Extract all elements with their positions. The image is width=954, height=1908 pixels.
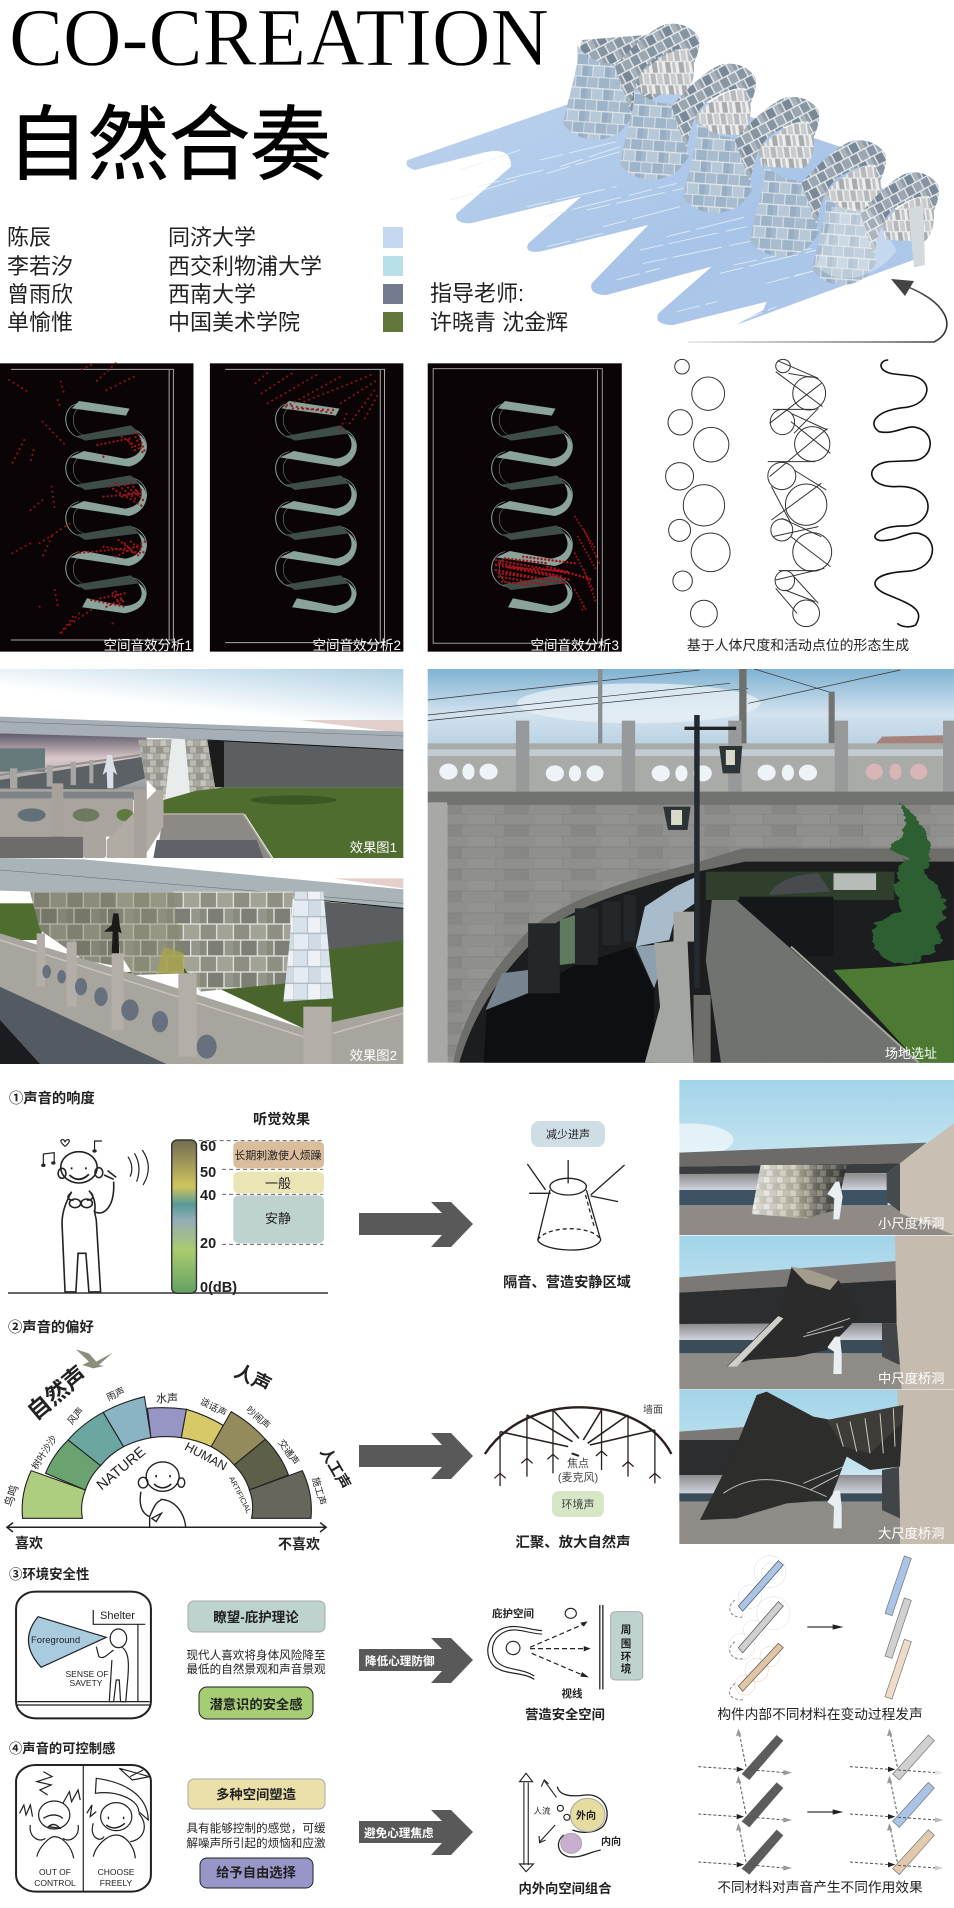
surrounding environment label: 围 <box>621 1638 631 1650</box>
team list <box>7 225 568 335</box>
section 1: loudness of sound: 减少进声 <box>546 1127 590 1141</box>
scale numbers <box>200 1139 237 1296</box>
arch opening <box>453 848 954 1063</box>
scale numbers: 60 <box>200 1139 216 1155</box>
section 2: sound preference: 不喜欢 <box>278 1536 320 1552</box>
theory box <box>188 1601 325 1632</box>
circles with tangents column <box>768 359 832 627</box>
universities: 同济大学 <box>168 225 256 250</box>
reduce sound box <box>531 1121 605 1147</box>
wall shadow <box>406 87 923 325</box>
segment labels: 风声 <box>65 1405 86 1427</box>
section 3: environmental safety: 视线 <box>562 1687 583 1700</box>
caption: 汇聚、放大自然声 <box>515 1533 631 1551</box>
free choice box <box>200 1858 313 1888</box>
dark figure <box>104 913 122 953</box>
description: 现代人喜欢将身体风险降至 <box>186 1648 326 1662</box>
render: medium bridge opening <box>679 1236 954 1389</box>
section 1: loudness of sound: 安静 <box>265 1211 291 1226</box>
hero render: serpentine shingled wall with shadow <box>406 24 939 325</box>
team names: 陈辰 <box>7 225 51 250</box>
render: view 1: 效果图1 <box>350 840 397 855</box>
inward/outward space diagram <box>520 1773 607 1872</box>
section 3: environmental safety: Foreground <box>31 1635 80 1646</box>
description: 最低的自然景观和声音景观 <box>186 1662 326 1676</box>
sound waves <box>128 1150 148 1185</box>
dark reflecting bars <box>742 1735 783 1875</box>
section 2: sound preference: 焦点 <box>567 1457 589 1470</box>
far rail <box>0 757 145 789</box>
material diagram: materials act differently on sound: 不同材料对声音产生不同作用效果 <box>717 1879 923 1895</box>
arrow with label <box>359 1810 473 1855</box>
render: view 2 <box>0 858 403 1064</box>
ground line <box>8 1292 328 1294</box>
section 1: loudness of sound <box>8 1089 631 1296</box>
description <box>186 1821 326 1850</box>
background through arch <box>706 872 894 900</box>
circles column <box>666 359 730 627</box>
render: medium bridge opening: 中尺度桥洞 <box>878 1371 944 1386</box>
category labels: 人工声 <box>316 1445 354 1492</box>
subconscious safety box <box>199 1687 313 1719</box>
grass <box>163 787 403 858</box>
arrow with label <box>359 1638 473 1683</box>
segment labels: 鸟鸣 <box>1 1483 21 1508</box>
render: view 2: 效果图2 <box>350 1048 397 1063</box>
bridge deck <box>0 858 403 908</box>
segment labels: 交通声 <box>275 1437 302 1467</box>
segment labels: 吵闹声 <box>243 1404 273 1432</box>
big arrow <box>359 1202 473 1247</box>
category labels: 自然声 <box>22 1361 92 1425</box>
ambient sound box <box>552 1491 604 1517</box>
section 4: sense of control: OUT OF <box>39 1867 71 1877</box>
paving <box>157 814 272 858</box>
heading: ②声音的偏好 <box>8 1318 94 1336</box>
universities: 中国美术学院 <box>168 310 300 335</box>
surrounding environment label: 境 <box>621 1662 632 1675</box>
heading: ③环境安全性 <box>9 1566 89 1582</box>
stone rail <box>0 789 133 837</box>
section 4: sense of control: FREELY <box>100 1878 133 1888</box>
caption: 营造安全空间 <box>525 1706 605 1722</box>
section 4: sense of control: 给予自由选择 <box>216 1864 297 1880</box>
foreground post <box>645 940 694 1063</box>
surrounding environment label: 环 <box>621 1651 632 1663</box>
panel: form generation diagram: 基于人体尺度和活动点位的形态生成 <box>687 637 909 653</box>
section 1: loudness of sound: 长期刺激使人烦躁 <box>234 1148 322 1162</box>
red sound particles <box>9 363 134 637</box>
description <box>186 1648 326 1676</box>
segment labels <box>1 1385 328 1508</box>
section 4: sense of control: 人流 <box>533 1806 551 1816</box>
refuge space diagram <box>488 1605 643 1689</box>
segment labels: 雨声 <box>105 1385 127 1404</box>
sound ripples <box>738 1556 786 1608</box>
render: view 1 <box>0 669 403 858</box>
category labels <box>22 1360 354 1515</box>
like/dislike axis <box>7 1523 326 1532</box>
panel: acoustic analysis 3 <box>428 363 622 653</box>
section 3: environmental safety: SENSE OF <box>66 1669 108 1679</box>
segment labels: 水声 <box>156 1391 178 1405</box>
segment labels: 树叶沙沙 <box>29 1433 60 1472</box>
advisors: 许晓青 沈金辉 <box>430 310 568 335</box>
advisors <box>430 281 568 335</box>
section 4: sense of control: 外向 <box>576 1809 596 1822</box>
material reflecting bars <box>893 1735 934 1875</box>
team names <box>7 225 73 335</box>
render: small bridge opening: 小尺度桥洞 <box>878 1216 944 1231</box>
sculpture shingles <box>30 892 120 967</box>
control comic <box>16 1765 151 1892</box>
render: large bridge opening <box>679 1390 954 1544</box>
decibel bar <box>172 1140 324 1293</box>
section 4: sense of control: 避免心理焦虑 <box>364 1826 434 1840</box>
colour swatches <box>383 227 403 332</box>
section 3: environmental safety: Shelter <box>100 1610 135 1622</box>
section 3: environmental safety: 潜意识的安全感 <box>209 1696 303 1712</box>
render: large bridge opening: 大尺度桥洞 <box>878 1526 944 1541</box>
section 2: sound preference: (麦克风) <box>558 1471 598 1484</box>
hearing effect labels: 听觉效果 <box>253 1110 310 1128</box>
tree <box>872 803 945 963</box>
caption: 内外向空间组合 <box>518 1880 612 1896</box>
music notes <box>43 1140 102 1165</box>
section 2: sound preference <box>1 1318 671 1552</box>
universities: 西交利物浦大学 <box>168 254 322 279</box>
category labels: NATURE <box>94 1444 149 1494</box>
heading: ④声音的可控制感 <box>9 1740 115 1756</box>
right bars <box>885 1556 911 1699</box>
universities <box>168 225 322 335</box>
cone diagram <box>527 1160 625 1250</box>
grass <box>834 960 954 1063</box>
section 4: sense of control: 内向 <box>601 1835 621 1848</box>
panel: form generation diagram <box>666 359 932 653</box>
team names: 单愉惟 <box>7 310 73 335</box>
left bars <box>738 1561 783 1691</box>
surrounding environment label: 周 <box>621 1624 631 1636</box>
lamp post <box>694 715 700 988</box>
section 2: sound preference: 环境声 <box>562 1497 594 1511</box>
spatial variety box <box>188 1779 325 1809</box>
category labels: ARTIFICIAL <box>227 1475 253 1515</box>
section 4: sense of control: CONTROL <box>34 1878 76 1888</box>
curved arrow <box>688 279 947 342</box>
section 1: loudness of sound: 一般 <box>265 1176 291 1191</box>
section 2: sound preference: 墙面 <box>643 1403 663 1416</box>
scale numbers: 50 <box>200 1165 216 1181</box>
render: small bridge opening <box>647 1080 954 1235</box>
site photo: bridge <box>428 669 954 1063</box>
railing <box>428 743 954 793</box>
section 4: sense of control <box>9 1740 621 1896</box>
description: 解噪声所引起的烦恼和应激 <box>186 1836 326 1850</box>
segment labels: 施工声 <box>309 1476 328 1507</box>
team names: 曾雨欣 <box>7 282 73 307</box>
section 4: sense of control: CHOOSE <box>98 1867 135 1877</box>
panel: acoustic analysis 3: 空间音效分析3 <box>530 637 619 653</box>
railing <box>0 933 403 1064</box>
section 3: environmental safety <box>9 1566 643 1722</box>
description: 具有能够控制的感觉，可缓 <box>186 1821 326 1835</box>
team names: 李若汐 <box>7 254 73 279</box>
sound rays left <box>698 1732 937 1868</box>
panel: acoustic analysis 1: 空间音效分析1 <box>103 637 192 653</box>
walkway <box>706 900 919 1063</box>
material diagram: components sound in motion <box>717 1556 923 1722</box>
category labels: HUMAN <box>182 1440 229 1473</box>
bird <box>76 1349 113 1368</box>
sculpture <box>138 739 215 799</box>
section 4: sense of control: 多种空间塑造 <box>216 1786 297 1802</box>
panel: acoustic analysis 2 <box>210 363 403 653</box>
section 3: environmental safety: 庇护空间 <box>492 1607 534 1620</box>
stone wall <box>428 792 954 805</box>
big arrow <box>359 1433 473 1479</box>
wall towers <box>563 24 939 285</box>
arrow <box>807 1626 833 1628</box>
white tower <box>283 892 333 1002</box>
universities: 西南大学 <box>168 282 256 307</box>
material diagram: materials act differently on sound <box>698 1728 943 1895</box>
surrounding environment label <box>621 1624 632 1675</box>
shingled pavilion <box>752 1165 847 1218</box>
person <box>103 755 117 788</box>
arrowheads <box>737 1767 895 1867</box>
water and piers <box>636 877 700 947</box>
section 3: environmental safety: 瞭望-庇护理论 <box>213 1609 299 1625</box>
arch focus diagram <box>485 1407 671 1486</box>
section 2: sound preference: 喜欢 <box>15 1535 43 1551</box>
preference fan chart <box>22 1397 311 1518</box>
power lines <box>428 669 900 721</box>
material diagram: components sound in motion: 构件内部不同材料在变动过程发声 <box>717 1707 923 1722</box>
scale numbers: 0(dB) <box>200 1280 237 1296</box>
scale numbers: 20 <box>200 1236 216 1252</box>
panel: acoustic analysis 1 <box>0 363 193 653</box>
segment labels: 谈话声 <box>198 1395 229 1419</box>
prospect-refuge comic <box>16 1592 151 1718</box>
shadow light streaks <box>450 142 820 322</box>
heading: ①声音的响度 <box>9 1089 95 1107</box>
category labels: 人声 <box>231 1360 275 1397</box>
site photo: bridge: 场地选址 <box>885 1046 937 1061</box>
final curve <box>872 360 932 627</box>
figure with headphones <box>41 1140 148 1292</box>
section 3: environmental safety: 降低心理防御 <box>365 1654 435 1668</box>
panel: acoustic analysis 2: 空间音效分析2 <box>312 637 401 653</box>
caption: 隔音、营造安静区域 <box>503 1274 631 1291</box>
listening figure <box>138 1462 186 1527</box>
title: 自然合奏: 自然合奏 <box>7 101 331 191</box>
advisors: 指导老师: <box>430 281 524 306</box>
section 3: environmental safety: SAVETY <box>70 1678 103 1688</box>
scale numbers: 40 <box>200 1188 216 1204</box>
